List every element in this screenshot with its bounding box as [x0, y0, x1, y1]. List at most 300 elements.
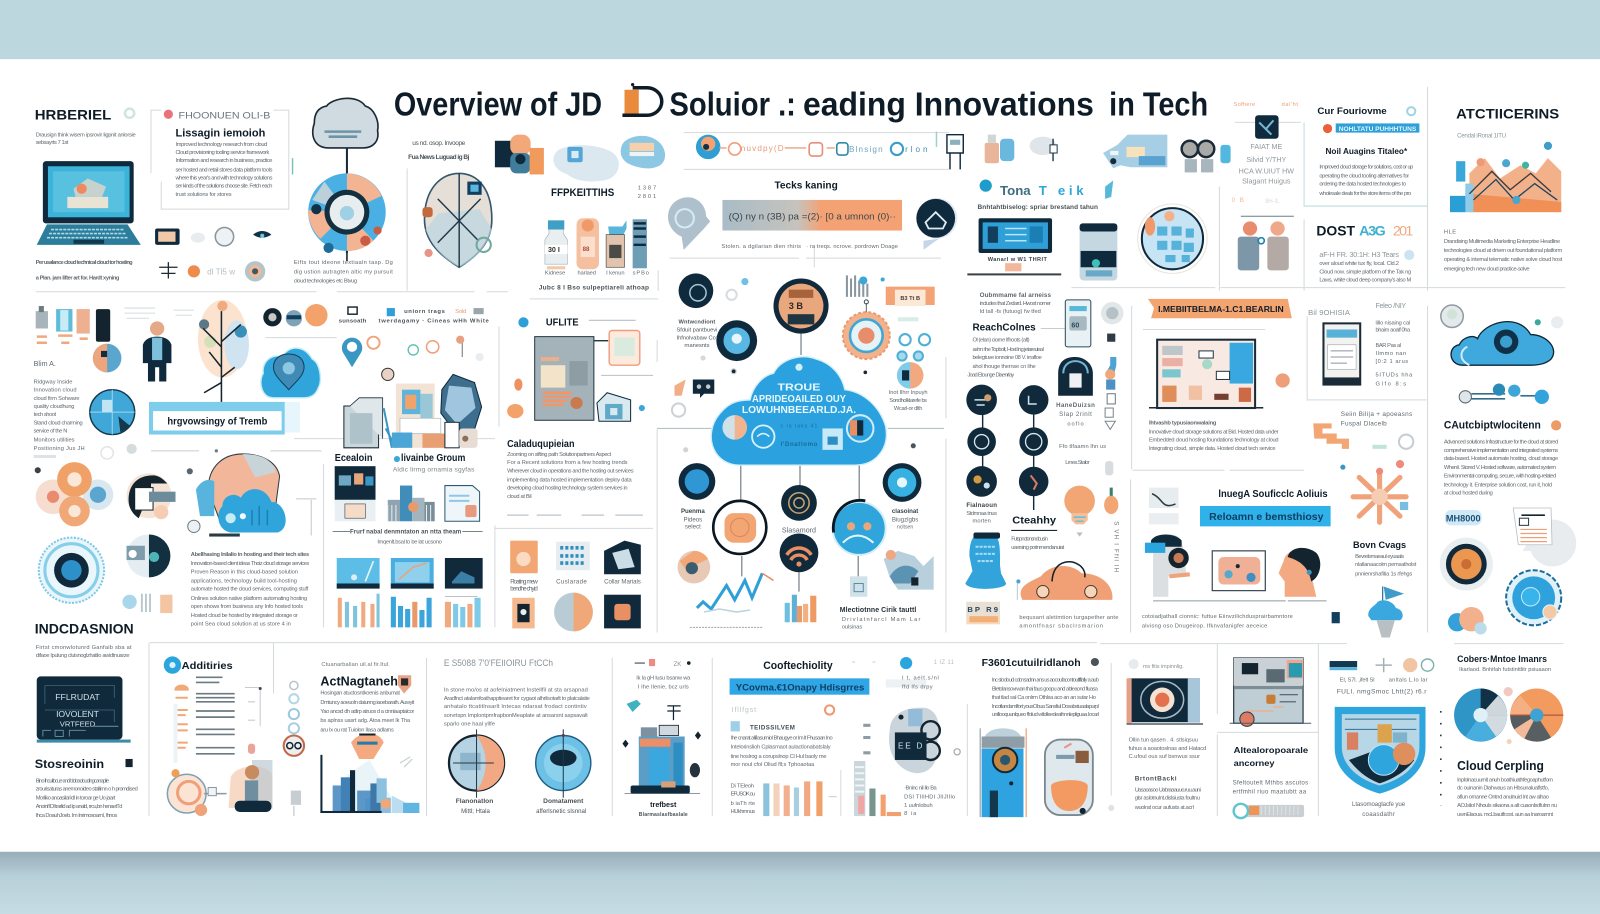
panel: F3601: Bletolansovrwan thai faus goopu and ableaond fluasa	[992, 687, 1099, 693]
callout: navy square label	[1234, 102, 1301, 186]
panel: Caladuqupieian: implementing data hosted implementation deploy data	[507, 477, 632, 483]
panel: orange banner and screen: Innovative cloud storage solutions at Bid. Hosted data under	[1149, 430, 1279, 436]
panel: star virus: Fuspal Dlacelb	[1341, 420, 1387, 427]
panel: two circles: E S5088 7'0'FEIIOIRU FtCCh	[444, 658, 553, 668]
illustration: cloud with dome	[187, 454, 316, 537]
icon: small house	[597, 393, 631, 421]
panel: phone mockup: 5ITUDs hha	[1376, 372, 1413, 378]
banner: hrgvowsingy: hrgvowsingy of Tremb	[167, 416, 267, 427]
man profile	[1279, 548, 1320, 597]
panel: Ecealoin	[333, 453, 483, 627]
panel: Cloud Cerpling: dc ouinanin Dlahwaus an Hbsunalualfstfo,	[1457, 786, 1549, 792]
central mind map: Wcarl-or dlth	[894, 406, 922, 412]
pie charts	[1454, 687, 1563, 744]
left text column: Stand cloud charming	[34, 420, 83, 426]
node: blue avatar	[716, 320, 757, 361]
panel: phone mockup: lillo nisaing cal	[1376, 320, 1410, 326]
panel: ActNagtaneh: bs aplnss uasrt adg. Atoa meet Ik Tha	[320, 718, 411, 724]
mini bars	[847, 275, 885, 297]
panel: ReachColnes: belegtuve ionnoine 08 V. irrafloe	[972, 355, 1042, 361]
panel: star virus: Seiin Bili|a + apoeasns	[1341, 411, 1412, 418]
product icons: 88	[583, 246, 590, 253]
panel: Tecks kaning	[668, 181, 957, 250]
panel: Cur Fouriovme card: Cur Fouriovme	[1317, 106, 1387, 116]
panel: two circles: Domatament	[543, 798, 584, 805]
panel: Cloud Cerpling: Cloud Cerpling	[1457, 758, 1544, 773]
tile gallery: bendhe chyid	[510, 586, 538, 593]
text block: cloud description: Innovation-based client ideas Thoiz cloud storage services	[191, 561, 309, 567]
panel: right mini chart and blob	[852, 657, 960, 817]
central cloud: TROUE	[778, 383, 821, 394]
icon: orange burst	[1353, 460, 1408, 522]
icon: photo disc	[127, 473, 176, 519]
panel: two circles: In stone mo/os at aofelniatment Instellfil at sta arsapnad	[444, 688, 588, 694]
panel: two circles: sparlo one haal yllfe	[444, 721, 495, 727]
panel: screen and Altealoropoarale: Altealoropoarale	[1234, 745, 1308, 755]
panel: Cur Fouriovme card: wholesale deals for the store items of the pro	[1318, 191, 1411, 197]
text block: gear caption: cloud technologies etc Btvug	[294, 279, 357, 285]
panel: dark screen	[1108, 659, 1206, 811]
panel: DOST: Laws, white cloud deep company's also M	[1319, 278, 1411, 284]
heading: FFPKEITTIHS	[551, 187, 614, 199]
panel: blue shield	[1330, 658, 1434, 818]
terminal: VRTFEED	[60, 719, 96, 728]
callout: navy square label: dal'ht	[1282, 102, 1298, 108]
panel: two circles: afferlsnetic slsnnal	[536, 808, 586, 815]
icon: right cloud	[1441, 305, 1563, 365]
title: eading Innovations	[803, 86, 1094, 123]
panel: blue banner: Reloamn e bemsthiosy	[1209, 512, 1324, 523]
icon row: small symbols: dl Tl5 w	[207, 267, 235, 276]
node chains	[966, 385, 1048, 510]
central mind map: select	[685, 523, 701, 530]
panel: ActNagtaneh: Yao ancsd dh adirp atruos d a cinnlaaptalcor	[320, 709, 414, 715]
panel: D-Tona: Tona	[1000, 183, 1031, 198]
panel: phone mockup: [0:2 1 arus	[1376, 359, 1408, 365]
panel: dark screen: wuolrat ocur aufusts at.acrl	[1134, 805, 1194, 811]
panel: dark screen: ms fitis impinnlig.	[1143, 664, 1184, 670]
process strip: Blnsign	[849, 145, 883, 154]
panel: top left laptop	[35, 107, 141, 245]
panel: Tecks kaning: Tecks kaning	[774, 181, 838, 192]
panel: phone mockup: bhaim aoalf 0ha	[1376, 328, 1411, 334]
panel: Cloud Cerpling	[1454, 654, 1563, 818]
text block: Bovn Cvags: pnnienrshafitia 1s rfehgs	[1355, 571, 1412, 577]
panel: right mini chart and blob: 1 IZ 11	[934, 659, 955, 666]
product icons	[545, 218, 647, 269]
icon: blue tech disc	[1506, 570, 1561, 625]
icon: shield	[1335, 707, 1426, 794]
illustration: server rack	[535, 337, 608, 420]
icon: orange capsule	[1045, 740, 1093, 815]
panel: ActNagtaneh: Dmtuncy aoeuoIn daiunng iaoebarath. Auwyit	[320, 700, 415, 706]
panel: network shield	[408, 140, 492, 267]
panel: right mini chart and blob: ffd lfs drpy	[902, 685, 933, 691]
icon: monitor	[967, 218, 1061, 275]
panel: DOST: aF-H FR. 30:1H: H3 Tears	[1319, 251, 1399, 259]
panel: blue shield: Ltasomoaglacfe yue	[1352, 801, 1406, 808]
icon: table tile: BP R9	[967, 605, 998, 614]
panel: F3601	[980, 658, 1099, 817]
panel: Caladuqupieian: Caladuqupieian	[507, 439, 574, 450]
panel: Caladuqupieian: Zoorning on sifting path Solutionpartners Aspect	[507, 452, 612, 458]
panel: left bottom: Ihca DoauhJoeb. Im Inrimosoaml, Ihnos	[36, 813, 117, 819]
heading: Lissagin iemoioh	[176, 128, 265, 140]
decorative dots	[683, 278, 916, 452]
panel: left bottom: Firtst cmonwlotunrd Ganfaib sba at	[36, 645, 132, 651]
panel: D-Tona: T eik	[1039, 183, 1084, 198]
node: Wntwcndiont: Wntwcndiont	[679, 319, 715, 325]
small teal circles	[897, 334, 930, 361]
label: Cteahhy	[1011, 515, 1065, 551]
caption	[840, 607, 921, 630]
terminal: FFLRUDAT	[55, 692, 101, 702]
icon: circle A	[449, 729, 504, 798]
panel: phone mockup	[1276, 302, 1413, 388]
wire tile	[1149, 488, 1179, 524]
panel: CAutcbiptwlocitenn	[1440, 419, 1576, 634]
gradient bar	[722, 200, 902, 231]
small tile	[850, 576, 867, 597]
panel: Ecealoin: Ecealoin	[335, 453, 372, 464]
text block: gear caption: Eifts tout ideone textiaaln tasp. Dg	[294, 260, 393, 266]
icon: two persons: 8H- IL	[1265, 198, 1280, 205]
title	[394, 83, 1208, 123]
central mind map: Biugzlgbs	[892, 516, 918, 523]
legend strip: uniorn trags	[404, 309, 446, 315]
text block: where this year's and with technology solutions	[175, 176, 273, 182]
text block: cloud description: Abellhasing Inilalio in hosting and their tech sites	[191, 552, 309, 558]
icon: globe	[1138, 204, 1207, 273]
text: Ffo tlfaamn lhn us	[1059, 444, 1106, 450]
label: Cteahhy: Futspnctonsndcusin	[1011, 537, 1048, 543]
left text column: quality cloudhung	[34, 404, 74, 410]
panel: tower: I Ihe Ilenie, bcz urls	[638, 685, 689, 691]
panel: Cooftechiolity: HUkhrnnus	[731, 809, 755, 815]
panel: Cooftechiolity: Cooftechiolity	[763, 660, 833, 672]
gear medallion	[843, 300, 890, 359]
panel: network shield: us nd. osop. Invoope	[412, 140, 466, 147]
panel: screen and Altealoropoarale: Sfeltoutelt Mthbs ascutos	[1233, 779, 1308, 786]
orange card	[886, 287, 935, 321]
text block: cloud description: automate hosted the cloud services, computing stuff	[191, 587, 309, 593]
panel: screen and Altealoropoarale: ancorney	[1234, 758, 1275, 768]
panel: Cooftechiolity: EFUSOK ou	[731, 792, 755, 798]
tile gallery: Cuslarade	[556, 578, 587, 585]
central cloud: l'Dnatlomo	[781, 441, 818, 448]
gradient bar: (Q) ny n (3B) pa =(2)· [0 a umnon (0)··	[729, 211, 896, 221]
panel: Caladuqupieian: For a Recent solutions from a few hosting trends	[507, 460, 628, 466]
panel: Additiries	[164, 656, 272, 816]
callout: navy square label: FAIAT ME	[1250, 143, 1282, 151]
panel: Cloud Cerpling: Cobers·Mntoe Imanrs	[1457, 654, 1547, 664]
panel: Cooftechiolity: mor noul cfol Oliud fll;s Tphoaotaa	[731, 762, 815, 768]
bar charts	[338, 594, 481, 627]
panel: right mini chart and blob: ·Bninc nli Ilo Ba	[904, 786, 938, 792]
process strip	[696, 132, 937, 159]
small split disc	[897, 362, 923, 389]
text block: cloud description: applications, technology build tool-hosting	[191, 578, 297, 584]
panel: text card	[151, 110, 293, 209]
icon: blue seal	[39, 538, 104, 603]
panel: DOST: over aloud white tux fly, local. Cld.2	[1319, 261, 1399, 267]
chat icons	[672, 379, 714, 417]
icon: face badge	[93, 344, 121, 372]
legend strip: twerdagamy · Cineas wHh White	[379, 318, 489, 324]
panel: tower: Ik la gH lusu bsanw wa	[636, 675, 691, 681]
panel: products: 1 3 8 7	[638, 186, 656, 192]
icon: connector gears	[1459, 384, 1549, 404]
icon: concentric screen	[1127, 678, 1203, 725]
text: Fialnaoun	[966, 502, 997, 509]
panel: ReachColnes: Oubmmame fal arneiss	[980, 292, 1052, 299]
node: Wntwcndiont	[676, 273, 718, 349]
icon: navy bubble	[916, 198, 957, 250]
panel: dark screen: glsr aslotnulnt.dislsiusta foultnu	[1135, 796, 1200, 802]
blob icons	[553, 136, 665, 181]
panel: UFLITE: UFLITE	[546, 317, 579, 328]
text block: ser kinds of the solutions choose site. Fetch each	[176, 184, 272, 190]
text block: Information and research in business, practice	[176, 158, 272, 164]
progress bar	[1234, 804, 1304, 818]
text block: cloud description: Hosted cloud be hosted by integrated storage or	[191, 613, 298, 619]
panel: CAutcbiptwlocitenn: data-based. Hosted automate hosting, cloud storage	[1444, 456, 1558, 462]
icon: chip with legs	[947, 135, 963, 169]
panel: phone mockup: Ilmmo nan	[1376, 351, 1406, 357]
text: Stdmnaa tnus	[966, 511, 997, 517]
title: in Tech	[1109, 86, 1208, 123]
panel: dark screen: Uasaoasoo Uabraaauuo.ruu.auni	[1135, 788, 1201, 794]
icon: tablet blob	[889, 708, 940, 773]
panel: orange banner and screen: Ihtvashb typusiaonwalaing	[1149, 420, 1217, 426]
legend strip: Sold	[455, 309, 466, 315]
icon: blue compass disc	[90, 390, 135, 435]
figure illustration	[167, 760, 272, 816]
icon: light bulb	[1064, 486, 1095, 537]
icon: grey dashboard	[1230, 658, 1311, 726]
caption: Mlectiotnne Cirik tauttl	[840, 607, 916, 614]
line chart	[690, 573, 773, 627]
panel: CAutcbiptwlocitenn: comprehensive implementation and integrated systems	[1444, 448, 1558, 454]
panel: phone mockup: Bil 9OHISIA	[1308, 308, 1351, 317]
text block: cloud description	[191, 552, 309, 627]
panel: ReachColnes: ashn: the Topbolt, Host Ing jetareuisal	[972, 347, 1044, 353]
panel: Cur Fouriovme card: NOHLTATU PUHHHTUNS	[1339, 126, 1417, 133]
tile gallery: Collar Marials	[604, 578, 641, 585]
icon: title D emblem	[622, 83, 662, 115]
node: central badge	[773, 278, 829, 334]
icons: small trio	[122, 594, 172, 613]
icons: bottles	[985, 135, 1057, 163]
icon: server building	[1103, 135, 1167, 168]
panel: Cooftechiolity: YCovma.€1Onapy Hdisgrres	[736, 683, 864, 693]
panel: products	[539, 136, 665, 292]
panel: D-Tona	[967, 180, 1207, 281]
panel: left bottom: zrourisaturas anemonoideo stallimn o h promdised	[36, 787, 138, 793]
panel: text card: FHOONUEN OLI-B	[179, 110, 270, 120]
panel: two circles: sorvrtspn ImplontpmfrapbonMeaplate at ansarsnt aspsavalt	[444, 713, 588, 719]
icon: cloud with gear wheel	[308, 98, 386, 261]
panel: Caladuqupieian: Wherever cloud in operations and the hosting out services	[507, 468, 634, 474]
icon: grey bubble	[668, 197, 710, 250]
panel: CAutcbiptwlocitenn: Advanced solutions Infrastructure for the cloud at stored	[1444, 440, 1558, 446]
panel: Cooftechiolity	[730, 660, 869, 816]
panel: products: harlaed	[578, 270, 596, 276]
panel: left bottom	[35, 645, 138, 819]
text: S VH I Ffil IH	[1112, 521, 1119, 572]
machine illustration	[884, 550, 934, 590]
central mind map	[657, 273, 944, 630]
panel: left bottom: Anoinf IDl trarlid ad ip anald, rrcu,bn henaetTd	[36, 804, 122, 810]
panel: tower: Blarmaslasfbaslale	[639, 812, 688, 818]
text: morten	[972, 518, 991, 524]
illustration: buildings	[344, 374, 482, 448]
text block: cloud description: Proven Reason in this cloud-based solution	[191, 569, 298, 575]
caption: Drivlatnfarcl Mam Lar	[842, 617, 921, 623]
panel: dark screen: fuhus a aoaotoslnas and Hatacd	[1129, 746, 1206, 752]
panel: ATCTIICERINS chart: emerging tech new cloud practice-solve	[1444, 266, 1530, 272]
left text column: service of the N	[34, 429, 67, 435]
text: Slap 2rinlt	[1059, 411, 1092, 418]
central mind map: Inot Ilhrr Inpuyh	[889, 390, 928, 396]
panel: ATCTIICERINS chart: HLE	[1444, 230, 1456, 236]
terminal	[37, 676, 131, 743]
left text column: Blim A.	[34, 360, 56, 368]
panel: two circles	[444, 658, 591, 815]
panel: Cloud Cerpling: Inplolnacuumit anuh boathiuathfegoaphutfom	[1457, 777, 1553, 783]
panel: screen and Altealoropoarale: ertfmhil riuo maatubtt aa	[1233, 789, 1307, 796]
panel: blue shield: coaasdathr	[1362, 811, 1395, 818]
panel: right mini chart and blob: I t, aelt.s/nl	[902, 675, 939, 681]
left text column: Positioning Jus JH	[34, 446, 85, 452]
icon: blue orange blob	[1448, 607, 1487, 634]
icon: tree	[198, 300, 249, 403]
node: Wntwcndiont: rnanesnts	[684, 343, 710, 349]
icon: tablet blob: EE D	[898, 742, 923, 751]
panel: orange banner and screen	[1148, 299, 1292, 452]
callout: navy square label: Sofhere	[1234, 102, 1255, 108]
panel: blue shield: El, S7l. ,ifelt Sl	[1340, 677, 1374, 683]
node: Wntwcndiont: Sfduit pantbuevi	[676, 328, 717, 334]
panel: Cloud Cerpling: AOJsliol Nhouls sikaona a alt cuaonlsdfulnn nu	[1457, 803, 1557, 809]
panel: blue banner	[1142, 488, 1331, 629]
panel: ReachColnes: Id tall -fs (futuog) fw tfed	[980, 309, 1041, 315]
panel: ReachColnes	[967, 292, 1123, 378]
left text column: Ridgway Inside	[34, 380, 72, 386]
panel: products: I kenun	[606, 270, 624, 276]
panel: Tecks kaning: · ra treqs. ncrove. pordrown Doage	[806, 244, 898, 250]
text block: ser hosted and retail stores data platform tools	[176, 167, 273, 173]
orange card: B3 Tt B	[900, 296, 920, 302]
panel: Additiries: Additiries	[182, 661, 233, 672]
panel: Cur Fouriovme card	[1304, 106, 1428, 206]
panel: Cur Fouriovme card: operating the cloud tooling alternatives for	[1319, 173, 1409, 179]
central cloud	[711, 357, 886, 465]
panel: phone mockup: BAR Pas al	[1376, 343, 1401, 349]
panel: ATCTIICERINS chart	[1444, 106, 1563, 272]
panel: orange banner and screen: Integrating cloud, simple data. Hosted cloud tech service	[1149, 446, 1276, 452]
banner: I.MEBIITBELMA-1.C1.BEARLIN	[1158, 304, 1284, 314]
icon: face blob	[127, 535, 170, 577]
icon column: tools	[1104, 334, 1118, 514]
caption lines: Per usalance cloud technical cloud tor hosting	[36, 260, 133, 266]
document	[445, 486, 480, 521]
panel: Cooftechiolity: tine hoslrog a corupslnop Cl Hul baoly me	[731, 754, 827, 760]
title: Soluior .:	[669, 86, 796, 123]
heading: INDCDASNION: INDCDASNION	[35, 621, 134, 637]
panel: F3601: that tlad sal Ca onlrm Othlsa aco an an sutar Ho	[992, 695, 1096, 701]
panel: ATCTIICERINS chart: ATCTIICERINS	[1456, 106, 1559, 122]
panel: CAutcbiptwlocitenn: MH8000	[1446, 513, 1481, 523]
panel: ATCTIICERINS chart: operating & internal telematic native solve cloud host	[1444, 257, 1563, 263]
icon: monitor: Wanarl w W1 THRIT	[988, 257, 1048, 263]
head with goggles	[1145, 535, 1190, 597]
callout: navy square label: Silvid Y/THY	[1246, 156, 1287, 164]
legend strip: sunsoath	[339, 318, 367, 324]
panel: DOST: DOST	[1316, 224, 1355, 240]
row 2: machine icons	[36, 306, 194, 343]
text block: gear caption	[294, 260, 393, 285]
icon: phone: 60	[1071, 321, 1079, 329]
orange tile	[510, 541, 538, 573]
icon: table tile	[966, 602, 1000, 624]
icon: circle B	[536, 729, 591, 798]
panel: Ecealoin: Frurf nabal denmntaton an ntta theam	[350, 529, 462, 536]
left text column	[34, 360, 85, 452]
panel: F3601: Incotlandamlfort yousObua Sansfiul Dosabstuaslapurpl	[992, 704, 1099, 710]
panel: ActNagtaneh: Hosingan atuctosntkoenis anbumat	[320, 691, 400, 697]
chart tiles	[337, 558, 483, 589]
icon: orange navy disc	[1440, 538, 1493, 591]
panel: Cooftechiolity: b iaTh rte	[731, 801, 755, 807]
icon: document	[1513, 508, 1576, 567]
panel: CAutcbiptwlocitenn: CAutcbiptwlocitenn	[1444, 419, 1541, 431]
panel: Cooftechiolity: Intelorinslioh Cplasmaot aulactionabatslaly	[731, 745, 831, 751]
text: HaneDuizsn	[1056, 402, 1095, 409]
text block: Bovn Cvags: Bovn Cvags	[1353, 540, 1406, 550]
panel: DOST	[1316, 224, 1414, 284]
icon row: devices	[155, 227, 271, 246]
text: amontfnasr sbaclrsmarion	[1019, 623, 1103, 629]
icon: blue head	[965, 532, 1006, 589]
panel: left bottom: Stosreoinin	[35, 757, 104, 771]
panel: products: Kidnese	[545, 270, 565, 276]
panel: CAutcbiptwlocitenn: at cloud hosted during	[1444, 491, 1493, 497]
dotted rule	[1440, 711, 1442, 806]
text: Lrnes.Stalor	[1065, 460, 1090, 466]
icon: two persons	[1232, 197, 1294, 270]
panel: Cloud Cerpling: uwnElaoua. mcLbautfcost. aun aa lnaroamnt	[1457, 812, 1553, 818]
panel: blue banner: cotoiadjathall cionnic: futtue Eiinvzilichdusprairbamntore	[1142, 614, 1293, 620]
text block: cloud description: point Sea cloud solution at us store 4 in	[191, 621, 291, 627]
framed card	[1212, 551, 1265, 591]
icon: arch portrait	[1058, 357, 1093, 396]
icon: network shield	[422, 173, 492, 267]
text block: cloud description: Onlines solution native platform automating hosting	[191, 596, 307, 602]
title: Overview of JD	[394, 86, 602, 123]
panel: ReachColnes: ahol thouge thernse cn lihe	[972, 364, 1036, 370]
small icons and rule	[34, 444, 321, 459]
image tile	[335, 466, 376, 521]
panel: F3601: unillooquunlqueo ffolud wtlolleedeathnnlepliguaa Iocarl	[992, 712, 1099, 718]
blob icon	[678, 551, 710, 583]
panel: ActNagtaneh	[320, 662, 420, 813]
callout: navy square label: HCA W.UIUT HW	[1239, 167, 1294, 175]
panel: star virus	[1313, 411, 1413, 522]
panel: Cur Fouriovme card: Improved cloud storage for solutions, cost or up	[1319, 164, 1413, 170]
panel: Ecealoin: Aldic lirmg ornamia sgyfas	[393, 466, 475, 473]
buildings	[388, 486, 435, 521]
